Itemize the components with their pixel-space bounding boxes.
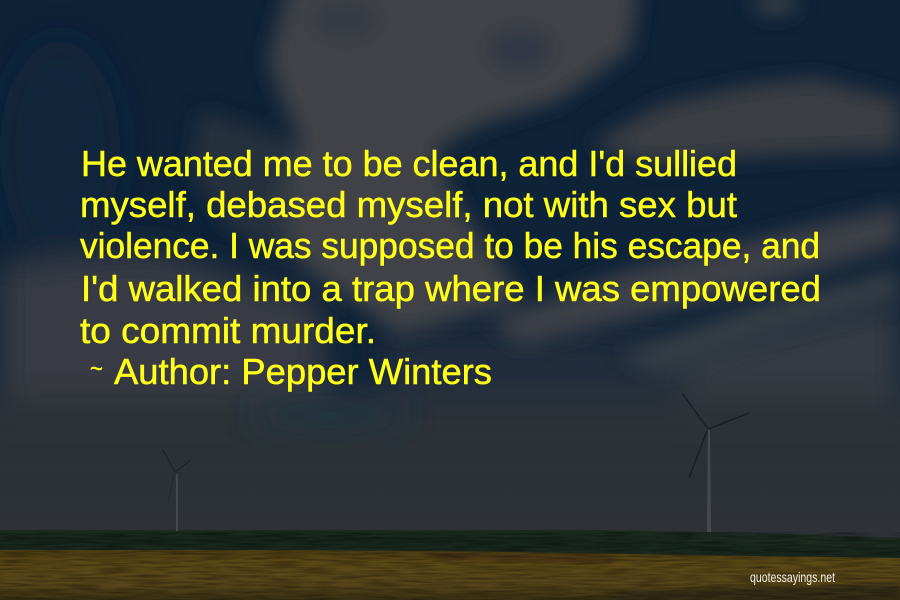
quote text: I'd walked into a trap where I was empowered <box>81 268 821 309</box>
author attribution: ~ <box>90 356 103 381</box>
quote text: He wanted me to be clean, and I'd sullied <box>81 143 737 184</box>
field: green band and golden crop <box>0 530 900 600</box>
quote text: to commit murder. <box>80 310 376 351</box>
quote text: violence. I was supposed to be his escape, and <box>80 225 820 266</box>
icon: small wind turbine <box>162 449 191 531</box>
quote text: myself, debased myself, not with sex but <box>80 184 737 225</box>
watermark: quotessayings.net <box>750 569 835 585</box>
lower sky haze <box>0 370 900 540</box>
icon: large wind turbine <box>682 393 749 532</box>
author attribution: Author: Pepper Winters <box>114 351 492 392</box>
quote text <box>80 143 821 351</box>
